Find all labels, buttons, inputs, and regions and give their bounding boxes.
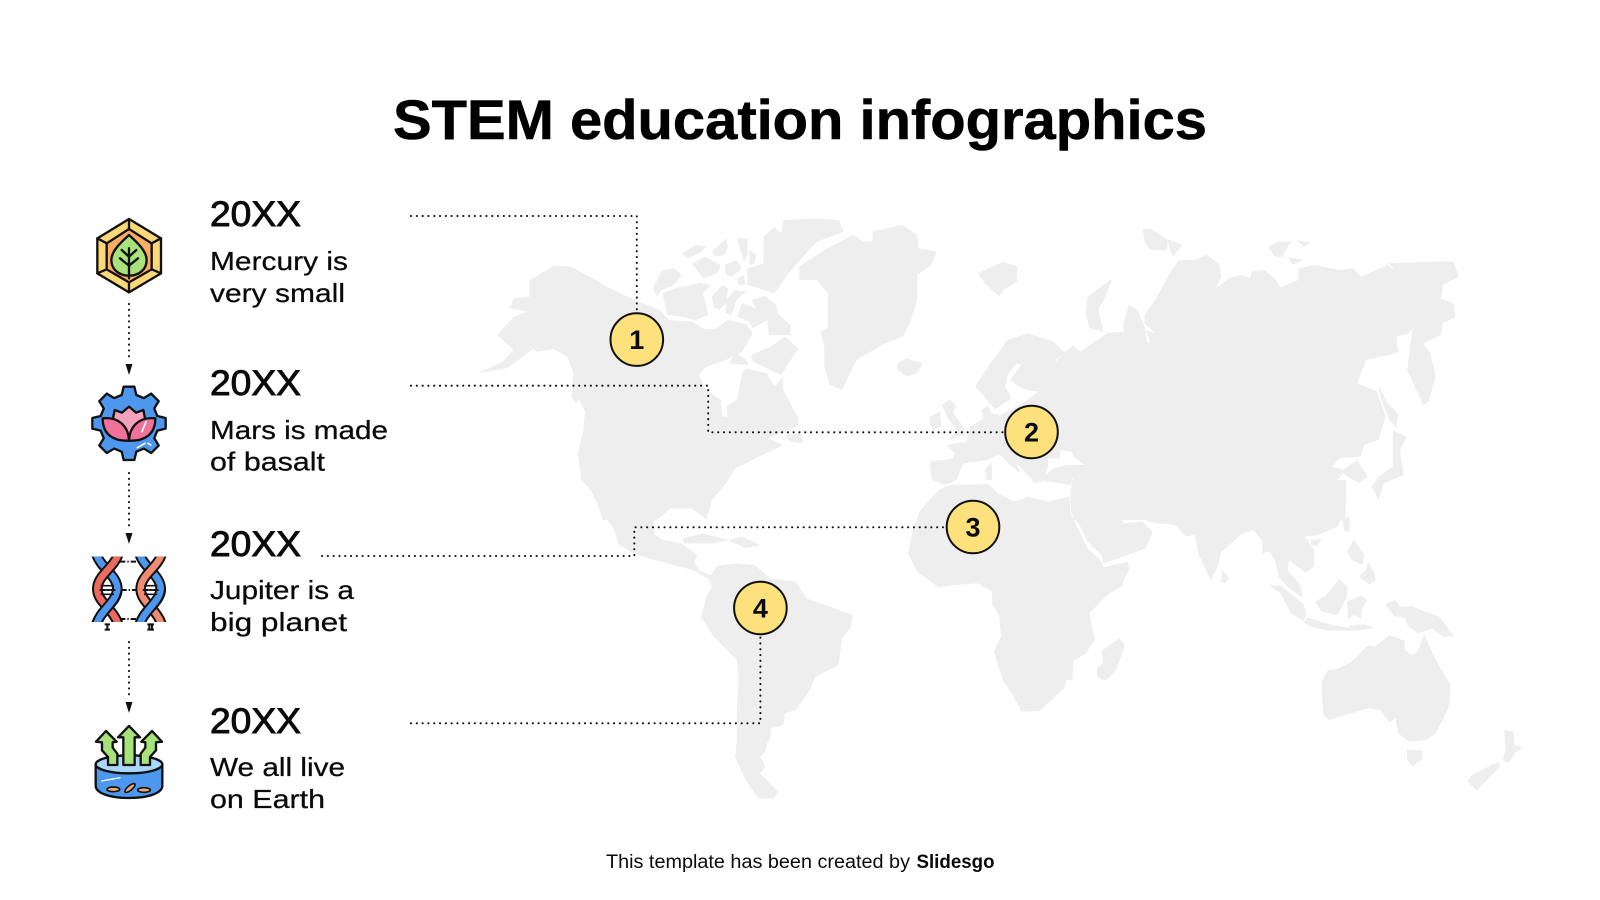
central and south america, africa: [585, 480, 1129, 798]
step 4 text: [210, 702, 345, 814]
marker 3: 3: [965, 512, 981, 542]
northern asia: [1057, 228, 1459, 520]
connector line 4: [411, 637, 760, 723]
marker 4: 4: [753, 594, 768, 624]
connector line 1: [411, 216, 637, 312]
step 1 text: very small: [210, 278, 345, 308]
step 1 text: 20XX: [210, 195, 301, 234]
step 4 text: We all live: [210, 752, 345, 782]
connector line 3: [322, 527, 946, 556]
icon: hexagon leaf: [97, 219, 161, 292]
step 3 text: big planet: [210, 607, 348, 637]
dna strand II: [139, 553, 162, 626]
step 3 text: 20XX: [210, 525, 301, 564]
step 2 text: 20XX: [210, 364, 301, 403]
footer credit: Slidesgo: [916, 852, 994, 873]
icon: dna helices: [96, 553, 162, 630]
marker 3: [947, 501, 999, 553]
world map: [477, 218, 1523, 798]
icon: gear with lotus: [92, 387, 166, 460]
step 1 text: Mercury is: [210, 246, 348, 276]
marker 4: [734, 582, 787, 634]
step 2 text: Mars is made: [210, 415, 388, 445]
connector line 2: [411, 386, 1003, 432]
europe: [930, 333, 1140, 485]
arrow: step 3 to 4: [126, 642, 132, 713]
marker 2: [1005, 406, 1058, 458]
title: STEM education infographics: [393, 88, 1207, 151]
step 3 text: Jupiter is a: [210, 575, 355, 605]
southern asia and oceania: [1070, 480, 1523, 791]
icon: petri dish with arrows: [96, 726, 162, 798]
step 4 text: 20XX: [210, 702, 301, 741]
step 2 text: of basalt: [210, 446, 326, 476]
step 4 text: on Earth: [210, 784, 325, 814]
dna strand I: [96, 553, 119, 626]
marker 1: [610, 313, 663, 366]
arrow: step 2 to 3: [126, 473, 132, 544]
step 3 text: [210, 525, 355, 637]
marker 2: 2: [1024, 418, 1039, 448]
footer credit: This template has been created by: [606, 852, 911, 873]
north america and arctic: [477, 218, 1017, 520]
arrow: step 1 to 2: [126, 304, 132, 375]
marker 1: 1: [629, 325, 644, 355]
step 1 text: [210, 195, 348, 308]
step 2 text: [210, 364, 388, 476]
